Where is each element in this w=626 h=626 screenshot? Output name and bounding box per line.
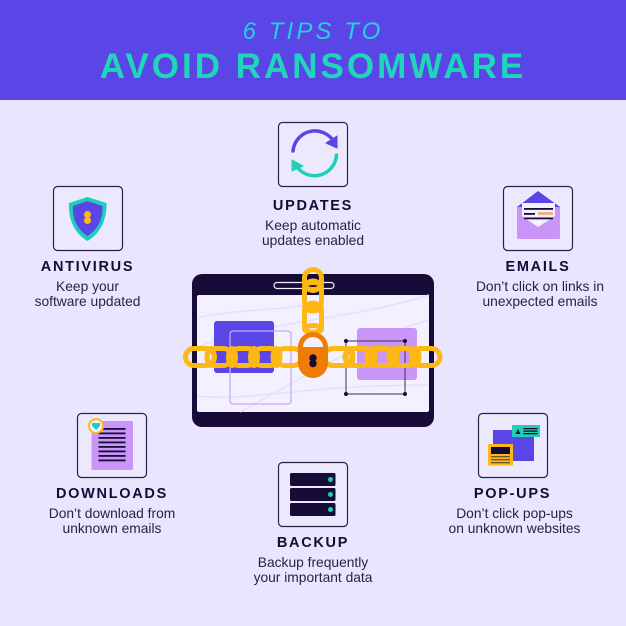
tip: antivirus: Keep your xyxy=(56,279,119,294)
title line 2: AVOID RANSOMWARE xyxy=(100,47,526,86)
horizontal chain xyxy=(186,348,440,366)
tip: emails xyxy=(476,259,604,309)
tip: downloads: unknown emails xyxy=(63,521,161,536)
vertical chain xyxy=(304,270,322,333)
tip: emails: EMAILS xyxy=(506,259,570,275)
title line 1: 6 TIPS TO xyxy=(243,18,383,45)
tip: backup: your important data xyxy=(254,570,372,585)
padlock xyxy=(298,332,328,378)
tip: updates: Keep automatic xyxy=(265,218,361,233)
tip: antivirus: software updated xyxy=(35,294,140,309)
tip: updates: UPDATES xyxy=(273,198,353,214)
icon: pop-ups xyxy=(478,414,548,478)
tip: pop-ups: Don’t click pop-ups xyxy=(456,506,573,521)
tip: backup: Backup frequently xyxy=(258,555,368,570)
tip: pop-ups: POP-UPS xyxy=(474,486,551,502)
icon: downloads xyxy=(78,414,146,478)
icon: backup xyxy=(278,462,348,526)
window shapes on screen xyxy=(214,321,417,404)
tip: updates xyxy=(262,198,364,248)
tip: downloads: DOWNLOADS xyxy=(56,486,168,502)
tip: antivirus: ANTIVIRUS xyxy=(41,259,134,275)
tablet body xyxy=(192,274,434,427)
icon: emails xyxy=(504,186,572,250)
tip: emails: Don’t click on links in xyxy=(476,279,604,294)
tip: pop-ups: on unknown websites xyxy=(449,521,580,536)
header banner xyxy=(0,0,626,100)
tip: downloads: Don’t download from xyxy=(49,506,175,521)
tip: emails: unexpected emails xyxy=(482,294,598,309)
tip: backup: BACKUP xyxy=(277,535,349,551)
tip: antivirus xyxy=(35,259,140,309)
tip: backup xyxy=(254,535,372,585)
tip: downloads xyxy=(49,486,175,536)
tip: pop-ups xyxy=(449,486,580,536)
icon: antivirus xyxy=(54,186,122,250)
tip: updates: updates enabled xyxy=(262,233,364,248)
